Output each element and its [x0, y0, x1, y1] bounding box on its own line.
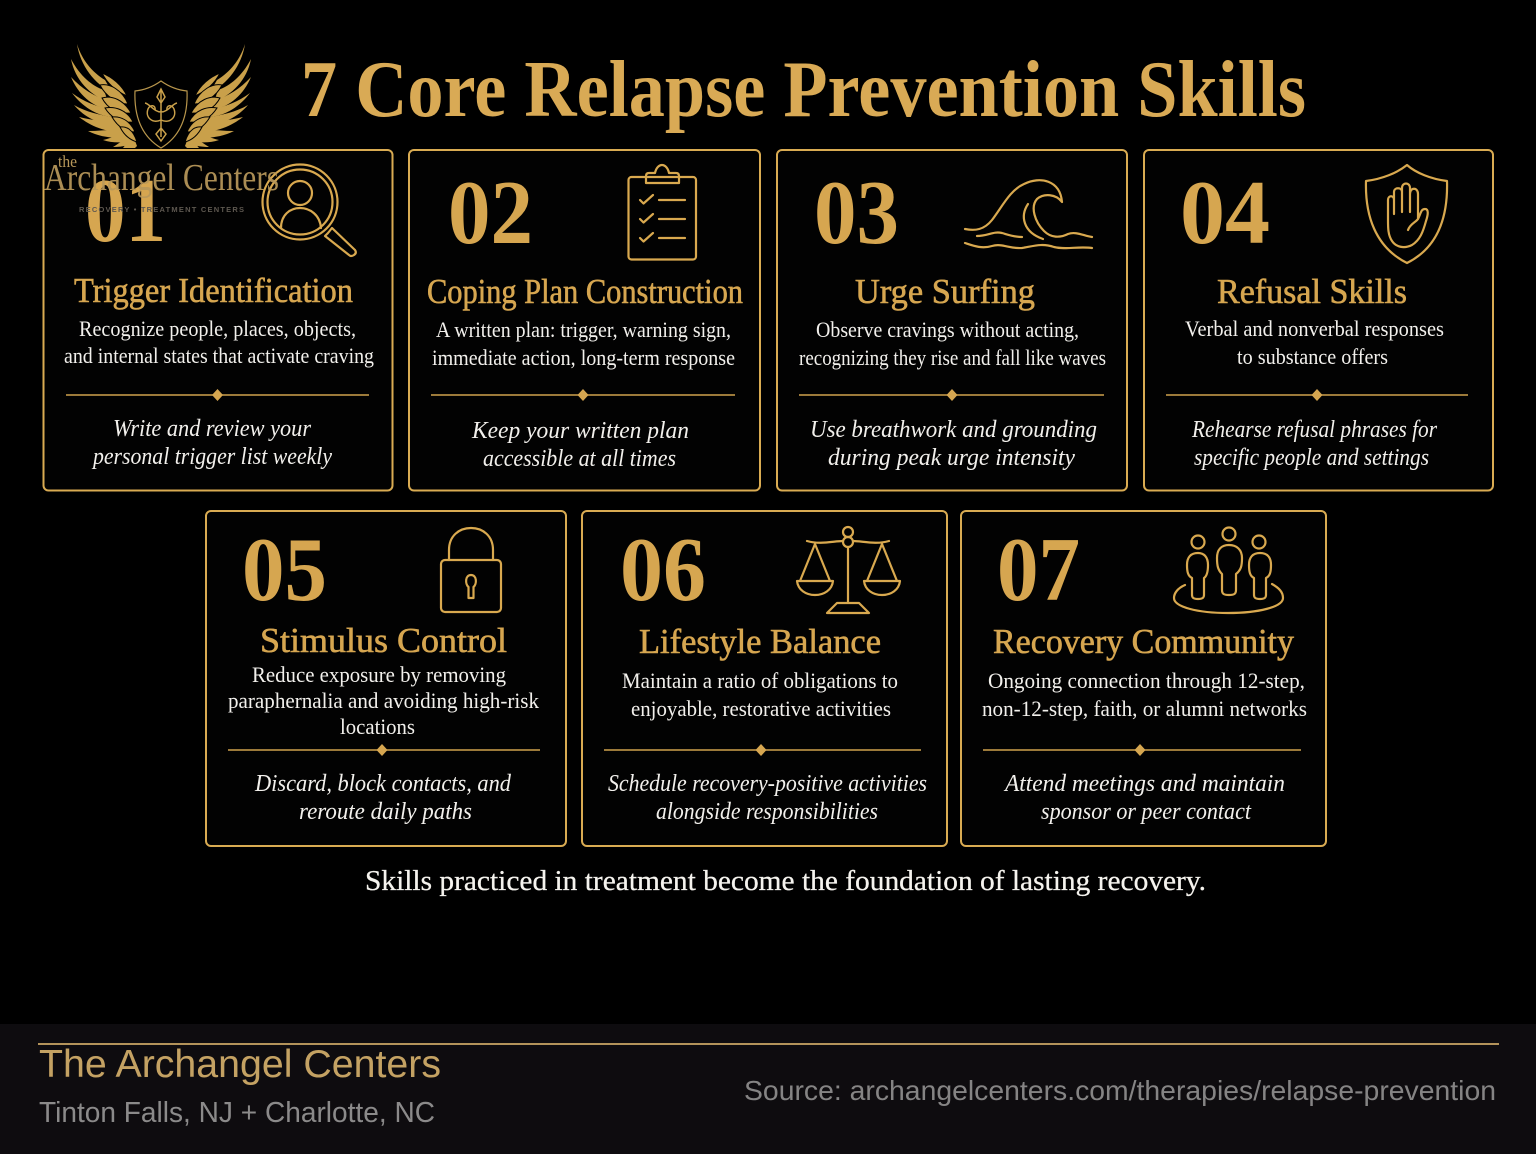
footer organisation name: The Archangel Centers — [39, 1043, 441, 1086]
panel: 01 trigger identification — [44, 150, 392, 490]
tip — [1191, 417, 1438, 471]
description — [1185, 316, 1444, 369]
icon: three people in circle — [1174, 528, 1283, 613]
description — [622, 668, 898, 721]
number 03: 03 — [814, 162, 899, 263]
heading: Stimulus Control — [260, 621, 507, 660]
description — [228, 662, 539, 739]
divider — [66, 389, 369, 401]
logo: winged shield with wordmark — [44, 44, 279, 214]
description: locations — [340, 714, 415, 739]
wordmark name: Archangel Centers — [44, 157, 279, 199]
description — [982, 668, 1307, 721]
number 05: 05 — [242, 519, 327, 620]
footer band — [0, 1024, 1536, 1154]
tip: Rehearse refusal phrases for — [1191, 417, 1438, 443]
panel: 03 urge surfing — [777, 150, 1127, 490]
description: Observe cravings without acting, — [816, 317, 1079, 342]
divider — [1166, 389, 1468, 401]
closing statement: Skills practiced in treatment become the foundation of lasting recovery. — [365, 866, 1206, 897]
heading: Trigger Identification — [74, 271, 353, 310]
tip — [254, 771, 512, 825]
tip: accessible at all times — [483, 446, 676, 472]
title: 7 Core Relapse Prevention Skills — [301, 46, 1306, 134]
footer locations: Tinton Falls, NJ + Charlotte, NC — [39, 1097, 435, 1129]
description — [64, 316, 374, 368]
footer source: Source: archangelcenters.com/therapies/relapse-prevention — [744, 1075, 1496, 1106]
tip: Schedule recovery-positive activities — [608, 771, 927, 797]
description: non-12-step, faith, or alumni networks — [982, 696, 1307, 721]
heading: Refusal Skills — [1217, 272, 1407, 311]
description: A written plan: trigger, warning sign, — [436, 317, 731, 342]
icon: wave — [965, 180, 1092, 248]
shield crest — [135, 81, 187, 148]
description: Verbal and nonverbal responses — [1185, 316, 1444, 341]
number 02: 02 — [448, 162, 533, 263]
tip: reroute daily paths — [299, 799, 472, 825]
number 04: 04 — [1180, 162, 1270, 263]
panel: 05 stimulus control — [206, 511, 566, 846]
tip: alongside responsibilities — [656, 799, 878, 825]
description: Ongoing connection through 12-step, — [988, 668, 1305, 693]
tip: during peak urge intensity — [828, 445, 1075, 471]
tip — [1003, 771, 1285, 825]
tip: personal trigger list weekly — [91, 444, 332, 470]
wordmark "the": the — [58, 152, 77, 171]
panel: 04 refusal skills — [1144, 150, 1493, 490]
description: paraphernalia and avoiding high-risk — [228, 688, 539, 713]
icon: shield with raised hand — [1366, 165, 1447, 263]
heading: Coping Plan Construction — [427, 272, 743, 311]
tip — [471, 418, 689, 472]
icon: clipboard checklist — [628, 165, 696, 260]
tip: Discard, block contacts, and — [254, 771, 512, 797]
panel: 07 recovery community — [961, 511, 1326, 846]
heading: Lifestyle Balance — [639, 622, 881, 661]
panel: 02 coping plan construction — [409, 150, 760, 490]
description: Recognize people, places, objects, — [79, 316, 356, 341]
number 07: 07 — [997, 519, 1080, 620]
description: and internal states that activate craving — [64, 343, 374, 368]
icon: padlock — [441, 528, 501, 612]
heading: Recovery Community — [993, 622, 1294, 661]
description: to substance offers — [1237, 344, 1388, 369]
heading: Urge Surfing — [855, 272, 1035, 311]
divider — [604, 744, 921, 756]
icon: balance scales — [797, 527, 900, 613]
left wing — [71, 44, 137, 148]
tip: Keep your written plan — [471, 418, 689, 444]
number 01: 01 — [85, 160, 166, 261]
description: Maintain a ratio of obligations to — [622, 668, 898, 693]
tip: specific people and settings — [1194, 445, 1429, 471]
panel: 06 lifestyle balance — [582, 511, 947, 846]
tip — [608, 771, 927, 825]
tip — [810, 417, 1097, 471]
divider — [431, 389, 735, 401]
divider — [983, 744, 1301, 756]
number 06: 06 — [620, 519, 706, 620]
tip: sponsor or peer contact — [1041, 799, 1252, 825]
wordmark tagline: RECOVERY • TREATMENT CENTERS — [79, 205, 244, 214]
tip — [91, 416, 332, 470]
divider — [799, 389, 1104, 401]
right wing — [185, 44, 251, 148]
description: immediate action, long-term response — [432, 345, 735, 370]
icon: magnifying glass with person — [262, 164, 356, 256]
divider — [228, 744, 540, 756]
description: Reduce exposure by removing — [252, 662, 506, 687]
tip: Write and review your — [113, 416, 312, 442]
description — [799, 317, 1106, 370]
tip: Use breathwork and grounding — [810, 417, 1097, 443]
tip: Attend meetings and maintain — [1003, 771, 1285, 797]
description — [432, 317, 735, 370]
description: recognizing they rise and fall like waves — [799, 345, 1106, 370]
description: enjoyable, restorative activities — [631, 696, 891, 721]
